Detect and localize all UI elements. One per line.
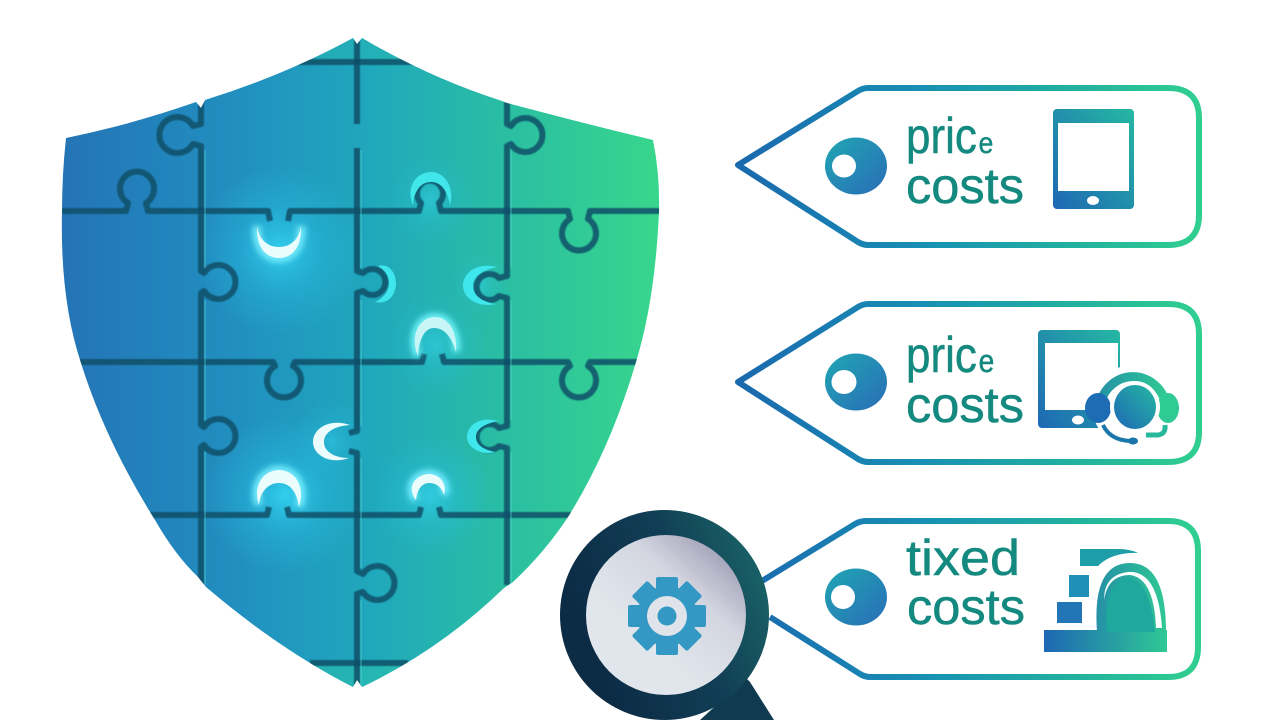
tag outline xyxy=(738,88,1199,245)
tag hole xyxy=(825,568,887,626)
magnifying glass with gear xyxy=(560,510,774,720)
tag hole xyxy=(825,138,887,194)
icon: gear xyxy=(628,577,706,655)
inner glow areas xyxy=(195,30,510,693)
tag outline xyxy=(738,304,1199,462)
icon: headset agent xyxy=(1085,365,1179,447)
label: costs xyxy=(907,579,1025,635)
seam highlights xyxy=(205,150,511,684)
shield made of puzzle pieces xyxy=(62,30,660,693)
icon: tablet xyxy=(1038,330,1120,428)
label: costs xyxy=(906,377,1024,433)
label: costs xyxy=(906,158,1024,214)
label: price xyxy=(906,107,993,164)
puzzle seams xyxy=(62,38,660,686)
icon: stepped arch xyxy=(1044,549,1167,652)
handle xyxy=(700,678,774,720)
label: tixed xyxy=(906,530,1020,586)
tag outline xyxy=(762,521,1198,677)
label: price xyxy=(906,326,994,383)
shield body xyxy=(62,38,659,687)
lens ring xyxy=(560,510,769,720)
tag: price costs with tablet xyxy=(738,88,1199,245)
lens xyxy=(586,535,746,695)
tag: fixed costs with building icon xyxy=(762,521,1198,677)
tag hole xyxy=(825,354,887,410)
icon: tablet xyxy=(1053,109,1134,209)
glowing tab highlights xyxy=(215,172,500,512)
tag: price costs with tablet and headset xyxy=(738,304,1199,462)
